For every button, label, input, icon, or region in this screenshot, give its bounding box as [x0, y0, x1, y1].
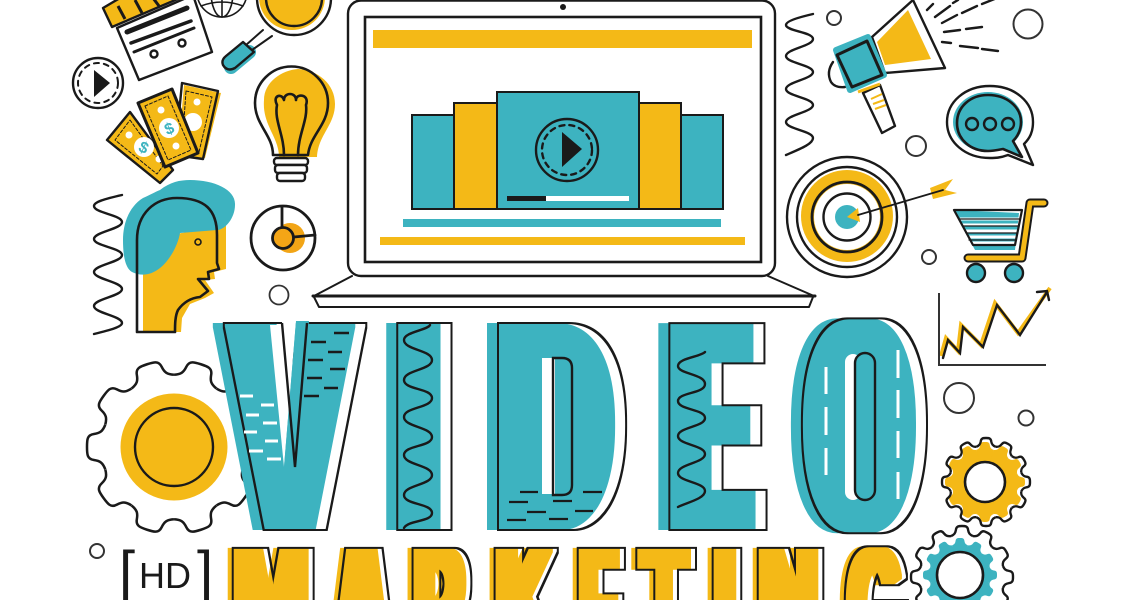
HD badge: HD: [139, 555, 191, 596]
D counter detail: [538, 354, 578, 500]
laptop: [313, 0, 815, 307]
megaphone sound rays: [927, 0, 998, 51]
icon: clapperboard: [103, 0, 212, 80]
letter outlines: E: [681, 266, 752, 588]
icon: head profile: [123, 180, 235, 332]
header bar: [373, 30, 752, 48]
icon: target with arrow: [787, 157, 957, 277]
play button: [536, 119, 598, 181]
icon: right squiggle: [786, 14, 813, 155]
V white dashes: [240, 396, 281, 459]
teal letter fills: [232, 259, 906, 592]
E squiggle: [678, 352, 705, 507]
icon: money bills: $: [136, 139, 151, 158]
laptop base: [313, 276, 815, 307]
HD badge: [119, 540, 213, 600]
teal letter fills: V: [232, 262, 336, 592]
webcam: [560, 4, 566, 10]
laptop screen: [365, 17, 761, 262]
gold letter fills: [231, 515, 898, 600]
teal letter fills: E: [670, 266, 741, 588]
chart: rising line: [939, 288, 1050, 365]
icon: megaphone: [829, 0, 998, 133]
teal letter fills: O: [801, 259, 906, 592]
I squiggle: [404, 325, 432, 528]
icon: globe: [197, 0, 247, 17]
icon: magnifier: [222, 0, 331, 69]
V notch detail: [270, 321, 309, 467]
O counter detail: [838, 352, 882, 502]
letter outlines: V: [243, 262, 347, 592]
icon: shopping cart: [954, 203, 1044, 282]
video carousel: [412, 92, 723, 209]
letter outlines: I: [376, 261, 473, 591]
gold letter outlines: [236, 515, 903, 600]
caption bar teal: [403, 219, 721, 227]
icon: pie dial: [251, 206, 315, 270]
teal letter fills: I: [365, 261, 462, 591]
icon: money bills: $: [162, 120, 177, 139]
letter outlines: D: [502, 262, 618, 591]
laptop body: [348, 0, 775, 276]
icon: teal gear: [911, 526, 1013, 600]
title: MARKETING: [231, 515, 903, 600]
teal letter fills: D: [491, 262, 607, 591]
icon: large gear: [87, 357, 261, 537]
icon: money bills: [107, 83, 221, 183]
V dark dashes: [304, 333, 349, 396]
D dashes: [507, 492, 602, 520]
decorative circle: [270, 286, 288, 304]
caption bar gold: [380, 237, 745, 245]
icon: left squiggle: [94, 195, 122, 334]
letter outlines: O: [812, 259, 917, 592]
progress bar: [507, 196, 629, 201]
decorative circles top right: [90, 10, 1042, 558]
icon: speech bubble: [947, 86, 1033, 165]
letter outlines: [243, 259, 917, 592]
icon: gold gear: [942, 438, 1030, 526]
icon: play button small: [73, 58, 123, 108]
icon: light bulb: [255, 66, 335, 181]
O white road dashes: [826, 350, 898, 499]
title: VIDEO: [232, 259, 917, 592]
